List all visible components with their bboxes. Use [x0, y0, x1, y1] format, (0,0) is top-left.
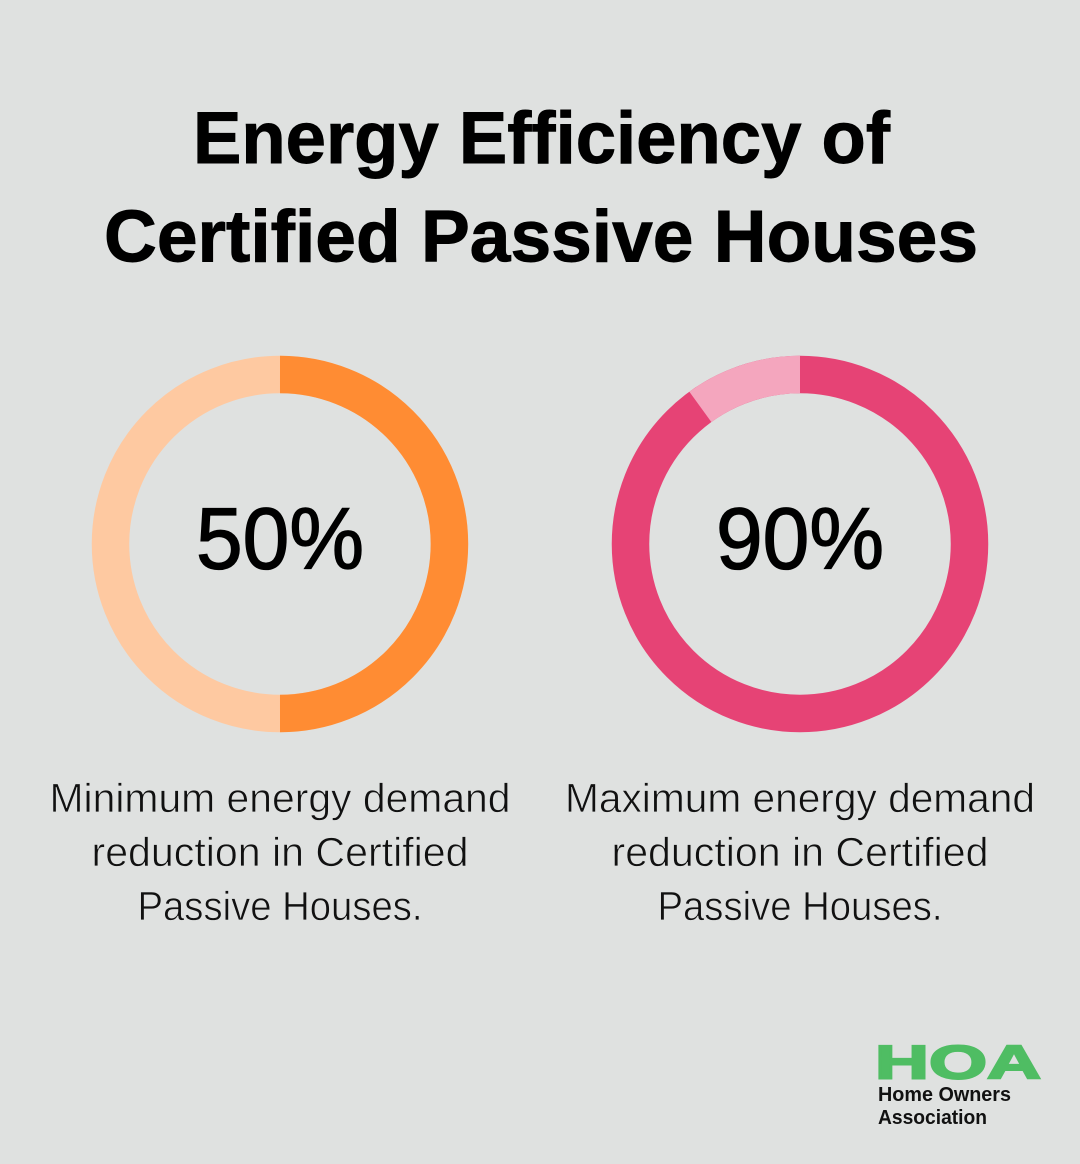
value: 50%: 50% [196, 490, 364, 588]
logo: HOA Home Owners Association [875, 1036, 1041, 1129]
caption: minimum: Minimum energy demand [50, 775, 510, 821]
caption: minimum: reduction in Certified [92, 829, 468, 875]
logo: HOA Home Owners Association: HOA [875, 1036, 1041, 1088]
caption: maximum: reduction in Certified [612, 829, 988, 875]
donut chart: 90% [630, 374, 970, 714]
caption: minimum: Passive Houses. [138, 883, 422, 929]
donut chart: 50% [110, 374, 450, 714]
value: 90%: 90% [716, 490, 884, 588]
title: Certified Passive Houses [104, 194, 978, 278]
caption: minimum [50, 775, 510, 929]
logo: HOA Home Owners Association: Home Owners [878, 1084, 1011, 1106]
caption: maximum [565, 775, 1035, 929]
panel: 90% maximum [565, 374, 1035, 929]
panel: 50% minimum [50, 374, 510, 929]
logo: HOA Home Owners Association: Association [878, 1107, 987, 1129]
caption: maximum: Passive Houses. [658, 883, 942, 929]
title [104, 96, 978, 278]
title: Energy Efficiency of [193, 96, 891, 179]
caption: maximum: Maximum energy demand [565, 775, 1035, 821]
